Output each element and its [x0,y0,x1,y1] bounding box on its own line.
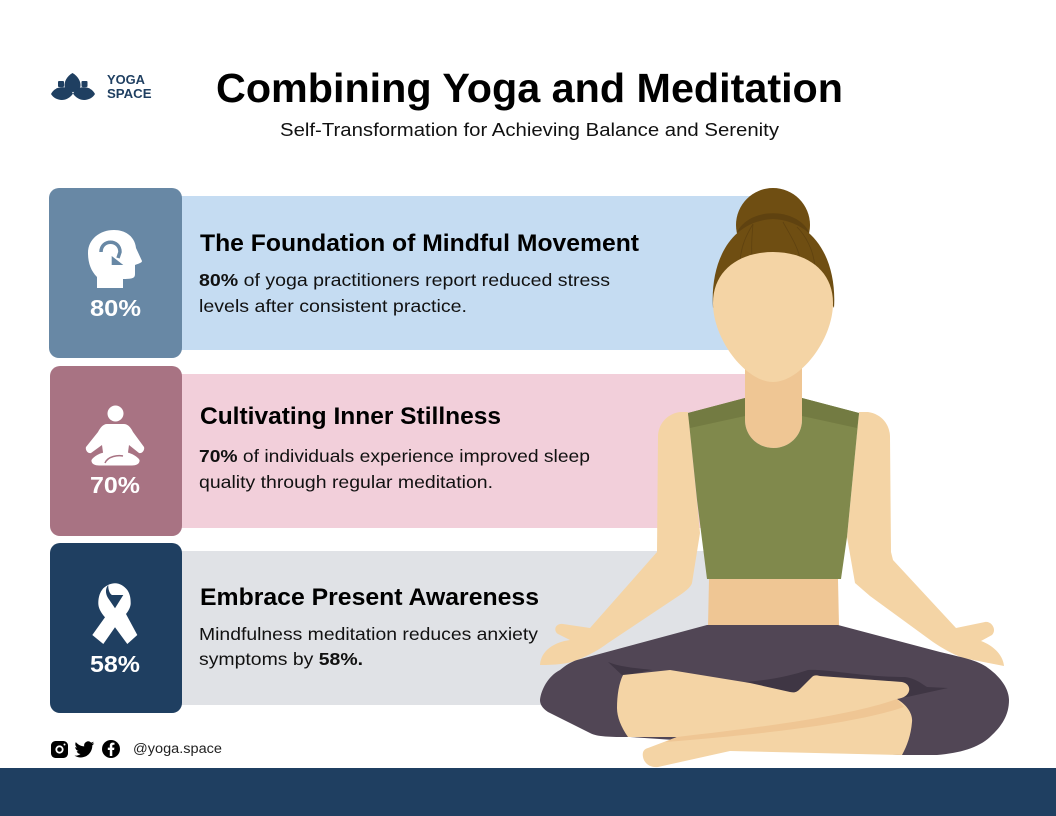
logo: Yoga Space [51,73,152,101]
icon: instagram [51,741,68,758]
shoulder straps [688,398,859,428]
trousers [540,625,1009,755]
neck [745,360,802,448]
logo wordmark [107,73,152,101]
panel background band [180,196,760,350]
stat tile 58% [50,543,182,713]
body text: symptoms by 58%. [199,649,363,669]
body text [199,624,538,669]
subtitle: Self-Transformation for Achieving Balance and Serenity [280,120,779,140]
stat tile 70% [50,366,182,536]
icon: lotus [51,73,95,100]
panel: present awareness [50,543,760,713]
body text: 80% of yoga practitioners report reduced stress [199,270,610,290]
heading: Embrace Present Awareness [200,584,539,611]
handle text: @yoga.space [133,741,222,756]
icon: meditating person [86,406,144,466]
panel: inner stillness [50,366,760,536]
body text: Mindfulness meditation reduces anxiety [199,624,538,644]
icon: twitter [74,741,94,757]
tank top [688,398,859,579]
footer bar [0,768,1056,816]
logo wordmark: SPACE [107,87,152,101]
social handles [51,740,222,758]
heading: Cultivating Inner Stillness [200,403,501,430]
waist [708,579,839,626]
panel background band [180,374,760,528]
panel: mindful movement [49,188,760,358]
stat 58%: 58% [90,651,140,677]
left arm [540,412,700,665]
stat tile 80% [49,188,182,358]
panel background band [180,551,760,705]
face [713,252,833,382]
body text: quality through regular meditation. [199,472,493,492]
stat 70%: 70% [90,472,140,498]
hair [713,219,834,308]
crossed legs [617,670,912,767]
icon: head with arrow [88,230,142,288]
right arm [847,412,1004,666]
stat 80%: 80% [90,295,141,321]
shin shade [665,699,904,742]
body text [199,446,590,492]
title: Combining Yoga and Meditation [216,65,843,111]
icon: facebook [102,740,120,758]
logo wordmark: YOGA [107,73,145,87]
body text: levels after consistent practice. [199,296,467,316]
hair bun [736,188,810,262]
body text: 70% of individuals experience improved sleep [199,446,590,466]
heading: The Foundation of Mindful Movement [200,230,639,257]
icon: awareness ribbon [92,583,137,644]
leg shadows [608,662,948,700]
body text [199,270,610,316]
illustration: seated woman meditating [540,188,1009,767]
